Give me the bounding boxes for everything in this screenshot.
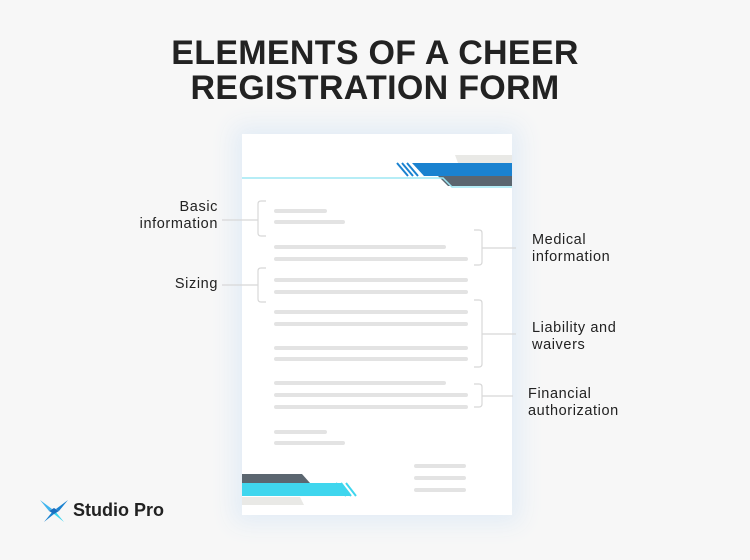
- form document: [242, 134, 512, 515]
- label: financial authorization: [528, 386, 619, 419]
- label: liability and waivers: waivers: [532, 337, 585, 353]
- title: ELEMENTS OF A CHEER: [171, 34, 579, 72]
- label: medical information: information: [532, 249, 610, 265]
- logo text: Studio Pro: [73, 500, 164, 520]
- label: liability and waivers: [532, 320, 616, 353]
- label: basic information: information: [140, 216, 218, 232]
- icon: logo mark: [40, 500, 68, 522]
- title: [171, 34, 579, 107]
- footer decoration: [242, 474, 356, 505]
- label: basic information: Basic: [180, 199, 218, 215]
- label: liability and waivers: Liability and: [532, 320, 616, 336]
- brackets and connectors: [222, 201, 516, 407]
- form lines: [274, 209, 468, 492]
- label: basic information: [140, 199, 218, 232]
- label: medical information: [532, 232, 610, 265]
- label: financial authorization: Financial: [528, 386, 591, 402]
- logo: [40, 500, 164, 522]
- label: medical information: Medical: [532, 232, 586, 248]
- label: sizing: Sizing: [175, 276, 218, 292]
- header decoration: [242, 155, 512, 187]
- label: financial authorization: authorization: [528, 403, 619, 419]
- title: REGISTRATION FORM: [190, 69, 560, 107]
